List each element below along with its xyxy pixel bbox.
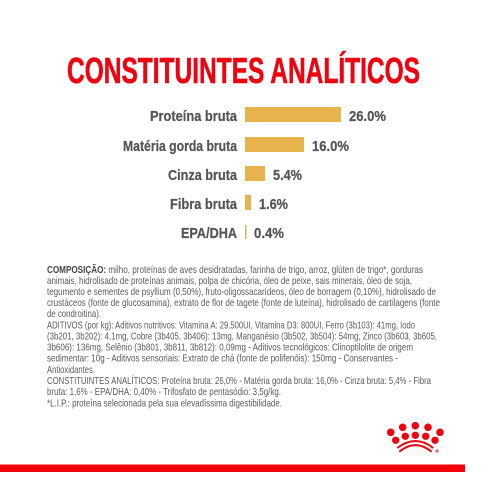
row: Proteína bruta [150,107,386,125]
row: Matéria gorda bruta [123,137,349,155]
row: Proteína bruta: Proteína bruta [150,108,238,125]
row: Matéria gorda bruta: Matéria gorda bruta [123,138,238,155]
composition text block: de condroitina). [47,308,101,320]
footer red bar [0,464,465,472]
row: EPA/DHA: 0.4% [254,225,284,242]
row: Fibra bruta: Fibra bruta [170,196,238,213]
row: Cinza bruta: 5.4% [273,167,302,184]
composition text block: sedimentar: 10g - Aditivos sensoriais: Extrato de chá (fonte de polifenóis): 150mg - Conservantes - [47,352,398,364]
bar chart: analytical constituents [123,107,386,242]
row: Cinza bruta: Cinza bruta [168,167,238,184]
icon: Royal Canin crown logo [387,422,444,453]
composition text block: *L.I.P.: proteína selecionada pela sua elevadíssima digestibilidade. [47,398,282,410]
row: Fibra bruta [170,195,288,213]
composition text block [47,263,440,410]
row: EPA/DHA [181,225,284,242]
row: Proteína bruta: 26.0% [349,108,386,125]
composition text block: bruta: 1,6% - EPA/DHA: 0,40% - Trifosfato de pentasódio: 3,5g/kg. [47,386,281,398]
row: Matéria gorda bruta: 16.0% [312,138,349,155]
composition text block: Antioxidantes. [47,364,95,376]
row: EPA/DHA: EPA/DHA [181,225,237,242]
row: Cinza bruta [168,166,302,184]
row: Fibra bruta: 1.6% [259,196,288,213]
